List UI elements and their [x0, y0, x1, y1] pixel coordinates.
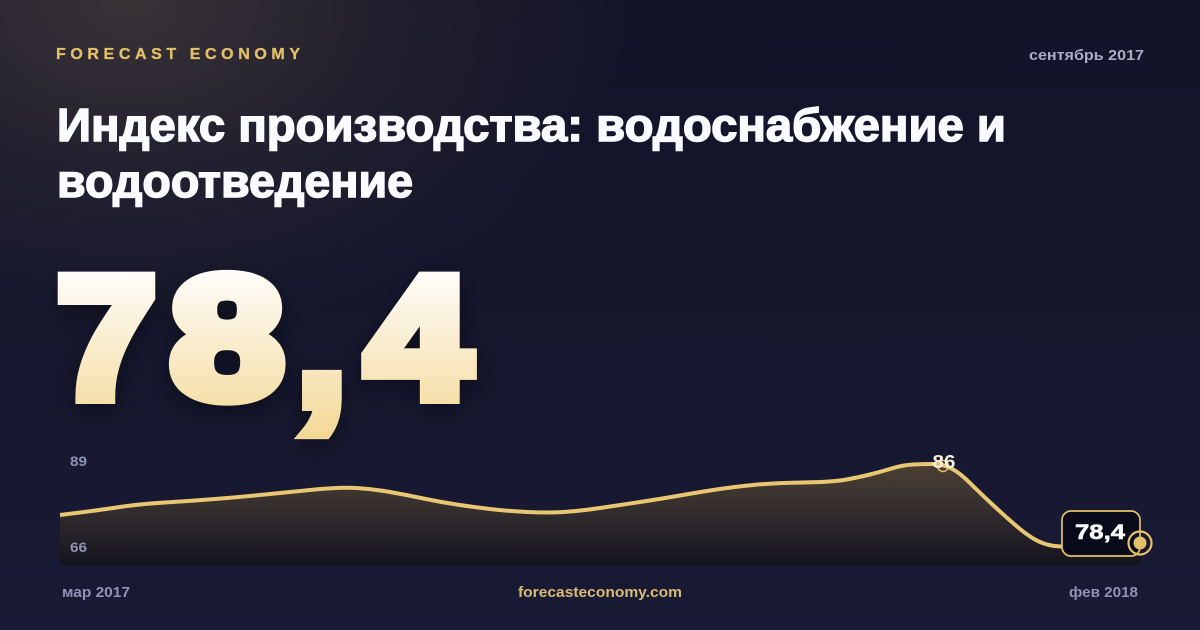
current value marker — [1128, 532, 1152, 554]
title: Индекс производства: водоснабжение и — [57, 99, 1006, 151]
chart line — [60, 464, 1080, 547]
current value callout: 78,4 — [1075, 520, 1125, 544]
title — [57, 99, 1006, 207]
axis min label: 66 — [70, 539, 87, 555]
chart area fill — [60, 464, 1141, 565]
brand label: FORECAST ECONOMY — [56, 46, 300, 63]
big number 78,4: 7 — [57, 241, 156, 433]
big number 78,4: 4 — [366, 242, 470, 434]
date label: сентябрь 2017 — [1029, 47, 1144, 64]
big number 78,4 — [57, 239, 470, 443]
line chart — [60, 452, 1152, 565]
title: водоотведение — [57, 155, 413, 207]
big number 78,4: 8 — [171, 242, 284, 434]
big number 78,4: , — [296, 239, 347, 443]
current value callout — [1062, 511, 1140, 556]
website label: forecasteconomy.com — [518, 585, 682, 601]
peak value: 86 — [932, 452, 956, 472]
end date label: фев 2018 — [1069, 584, 1138, 601]
axis max label: 89 — [70, 453, 87, 469]
start date label: мар 2017 — [62, 584, 130, 601]
peak marker — [938, 460, 948, 472]
